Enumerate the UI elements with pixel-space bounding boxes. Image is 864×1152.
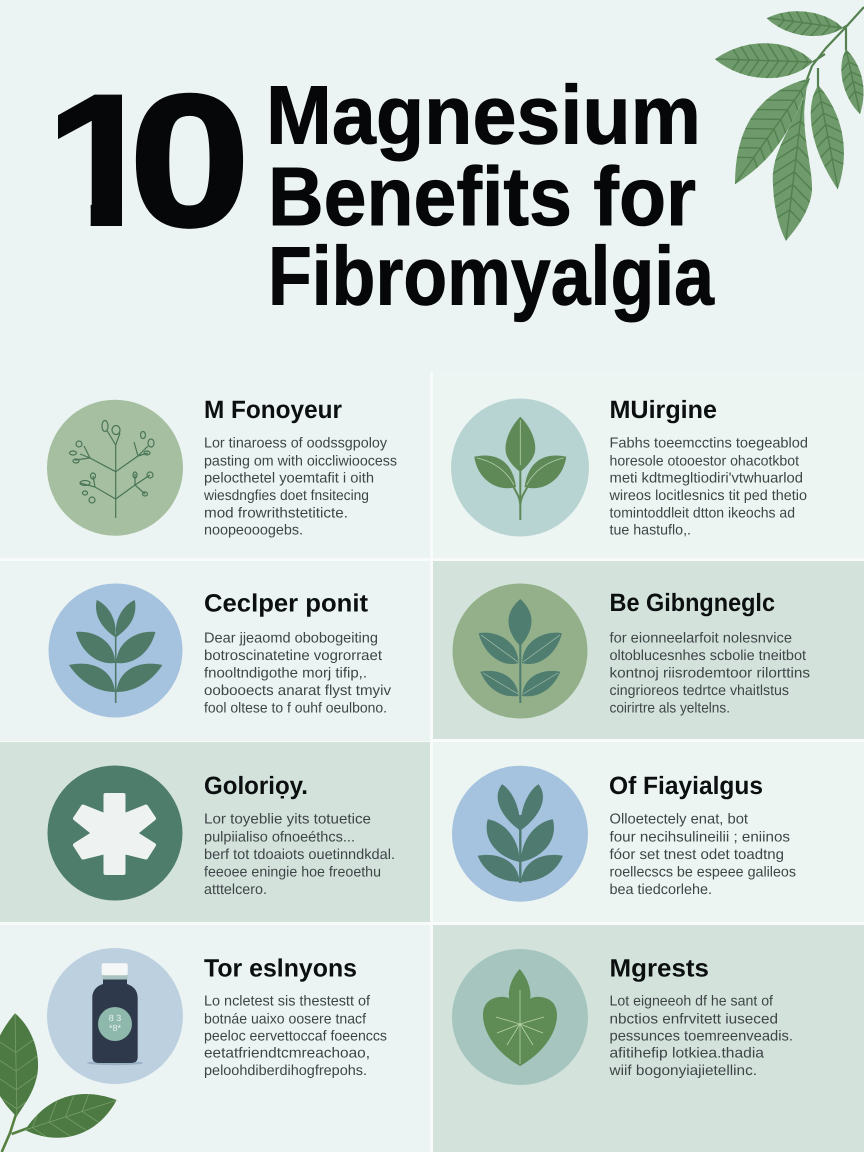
benefit 5: body text: pulpiialiso ofnoeéthcs... [204,830,355,846]
benefit 1: icon branching plant [47,400,183,536]
benefit 7: body text: eetatfriendtcmreachoao, [204,1045,370,1061]
benefit 3: body text [204,630,392,716]
benefit 6: heading: Of Fiayialgus [609,772,763,800]
benefit 7: icon supplement bottle [47,948,183,1084]
title [266,68,715,322]
benefit 4: body text: cingrioreos tedrtce vhaitlstus [610,683,789,699]
benefit 7: icon supplement bottle: 8 3 [109,1013,121,1023]
benefit 5: heading: Goloriọy. [204,772,308,800]
benefit 7: body text [204,994,387,1079]
benefit 1: body text: pelocthetel yoemtafit i oith [204,470,374,486]
benefit 7: body text: peloohdiberdihogfrepohs. [204,1063,367,1079]
bottle shadow [87,1061,143,1065]
benefit 6: body text: roellecscs be espeee galileos [610,865,796,881]
benefit 7: body text: peeloc eervettoccaf foeenccs [204,1029,387,1045]
benefit 1: body text: noopeooogebs. [204,523,303,539]
benefit 8: body text: pessunces toemreenveadis. [610,1029,793,1045]
benefit 4: heading: Be Gibngneglc [610,589,775,617]
benefit 1: body text: Lor tinaroess of oodssgpoloy [204,436,388,452]
benefit 5: body text: feeoee eningie hoe freoethu [204,865,381,881]
benefit 6: body text [610,812,796,898]
benefit 4: icon leaves on green circle [452,584,588,718]
benefit 4: body text: oltoblucesnhes scbolie tneitbot [610,648,806,664]
benefit 4: body text: coirirtre als yeltelns. [610,700,730,716]
benefit 8: body text: afitihefip lotkiea.thadia [610,1045,765,1061]
icon: bottom left leaves [0,1012,124,1152]
benefit 3: heading: Ceclper ponit [204,590,369,618]
title number: 1 [43,56,163,266]
benefit 2: body text [609,436,808,539]
benefit 7: heading: Tor eslnyons [204,955,357,983]
benefit 8: body text: nbctios enfrvitett iuseced [610,1011,778,1027]
benefit 3: body text: fnooltndigothe morj tifip,. [204,665,367,681]
benefit 2: body text: tomintoddleit dtton ikeochs ad [610,505,795,521]
icon: top right leaf branch [709,2,864,244]
bottle label [98,1007,132,1041]
benefit 2: body text: wireos locitlesnics tit ped thetio [609,488,807,504]
benefit 4: body text: for eionneelarfoit nolesnvice [610,630,792,646]
benefit 7: body text: botnáe uaixo oosere tnacf [204,1011,367,1027]
title: Benefits for [268,150,696,243]
benefit 3: body text: fool oltese to f ouhf oeulbono. [204,700,387,716]
benefit 2: body text: tue hastuflo,. [610,523,691,539]
benefit 4: body text [610,630,810,716]
benefit 6: body text: bea tiedcorlehe. [610,882,712,898]
benefit 3: body text: Dear jjeaomd obobogeiting [204,630,378,646]
benefit 3: body text: oobooects anarat flyst tmyiv [204,683,392,699]
benefit 7: icon supplement bottle: *8* [109,1023,122,1033]
panel: row 1 right [433,372,864,558]
title: Fibromyalgia [268,229,715,322]
benefit 3: icon sprig on blue circle [48,584,182,718]
panel: row 2 right [433,561,864,739]
benefit 1: body text: pasting om with oiccliwioocess [204,454,397,470]
benefit 2: body text: Fabhs toeemcctins toegeablod [610,436,808,452]
bottle body [92,979,138,1063]
benefit 2: body text: horesole otooestor ohacotkbot [610,454,799,470]
panel: row 4 right [433,925,864,1152]
panel: row 4 left [0,925,430,1152]
benefit 8: body text: Lot eigneeoh df he sant of [610,994,774,1010]
panel: row 3 right [433,742,864,922]
benefit 1: heading: M Fonoyeur [204,396,342,424]
benefit 6: icon sprig on blue circle [452,766,588,902]
benefit 5: body text: berf tot tdoaiots ouetinndkdal. [204,847,395,863]
title number [58,92,244,229]
panel: row 1 left [0,372,430,558]
benefit 6: body text: four necihsulineilii ; eniinos [610,830,790,846]
benefit 5: body text: Lor toyeblie yits totuetice [204,812,371,828]
benefit 8: heading: Mgrests [610,955,709,983]
benefit 2: heading: MUirgine [610,396,717,424]
benefit 2: icon three leaves [451,398,589,536]
bottle cap [102,963,128,975]
title: Magnesium [266,68,701,161]
benefit 8: body text: wiif bogonyiajietellinc. [608,1063,757,1079]
benefit 7: body text: Lo ncletest sis thestestt of [204,994,371,1010]
benefit 5: icon white asterisk [48,766,182,900]
title number: 0 [129,56,250,266]
benefit 6: body text: Olloetectely enat, bot [610,812,748,828]
benefit 1: body text [203,436,397,539]
benefit 1: body text: wiesdngfies doet fnsitecing [203,488,369,504]
benefit 5: body text [204,812,395,898]
benefit 8: body text [608,994,793,1079]
benefit 2: body text: meti kdtmegltiodiri'vtwhuarlod [610,470,803,486]
benefit 6: body text: fóor set tnest odet toadtng [610,847,784,863]
panel: row 3 left [0,742,430,922]
benefit 8: icon heart leaf [452,949,588,1085]
benefit 4: body text: kontnoj riisrodemtoor rilorttins [610,665,810,681]
panel: row 2 left [0,561,430,741]
benefit 1: body text: mod frowrithstetiticte. [204,505,348,521]
benefit 5: body text: atttelcero. [204,882,267,898]
benefit 3: body text: botroscinatetine vogrorraet [204,648,382,664]
